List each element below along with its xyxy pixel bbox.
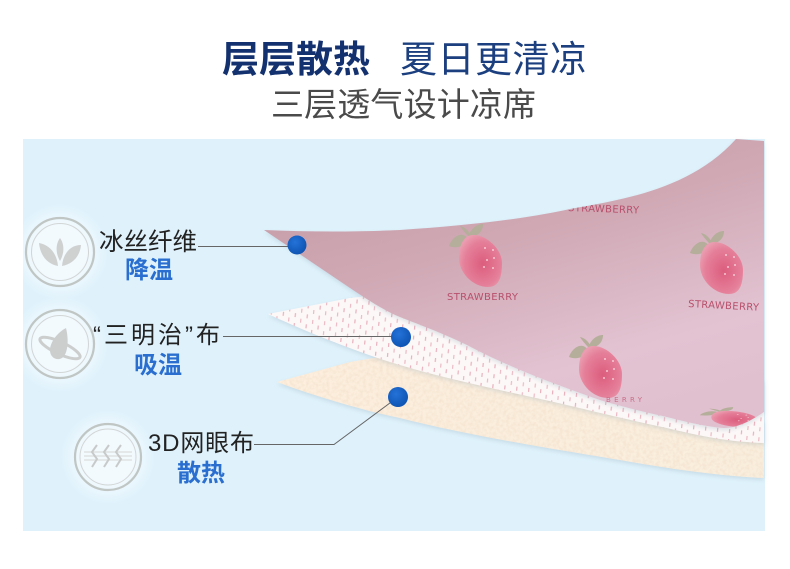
print text 2: STRAWBERRY: [688, 299, 760, 314]
icon: droplet orbit badge: [12, 296, 108, 392]
icon: heat waves badge: [61, 410, 155, 504]
layer: 3D mesh beige: [277, 350, 764, 478]
label: ice silk fiber: 冰丝纤维: [99, 228, 197, 256]
benefit: cooling: 降温: [125, 257, 173, 284]
subtitle: 三层透气设计凉席: [271, 86, 536, 123]
benefit: absorbing: 吸温: [134, 352, 182, 379]
leader line 1: [198, 246, 297, 248]
label: 3D mesh fabric: 3D网眼布: [148, 430, 254, 457]
title: second part: 夏日更清凉: [400, 39, 587, 80]
strawberry prints: [447, 203, 760, 428]
marker dot 1: [288, 236, 306, 254]
print text 1: STRAWBERRY: [447, 292, 519, 303]
layer: ice silk pink: [264, 139, 764, 428]
leader line 2: [223, 336, 401, 338]
print text 3: STRAWBERRY: [568, 203, 640, 217]
marker dot 3: [388, 387, 408, 407]
panel: background: [23, 139, 765, 531]
print text 4 fragment: BERRY: [606, 396, 643, 404]
strawberry 2: [690, 231, 743, 294]
leader line 3: [254, 397, 398, 444]
layer: sandwich mesh: [268, 290, 764, 443]
strawberry 4: [700, 407, 756, 426]
marker dot 2: [391, 327, 411, 347]
label: sandwich fabric: “三明治”布: [93, 322, 220, 349]
strawberry 3: [569, 335, 622, 398]
benefit: heat dissipation: 散热: [177, 460, 225, 487]
title: 层层散热: [222, 39, 370, 80]
strawberry 1: [449, 224, 502, 287]
icon: leaves badge: [12, 204, 108, 300]
